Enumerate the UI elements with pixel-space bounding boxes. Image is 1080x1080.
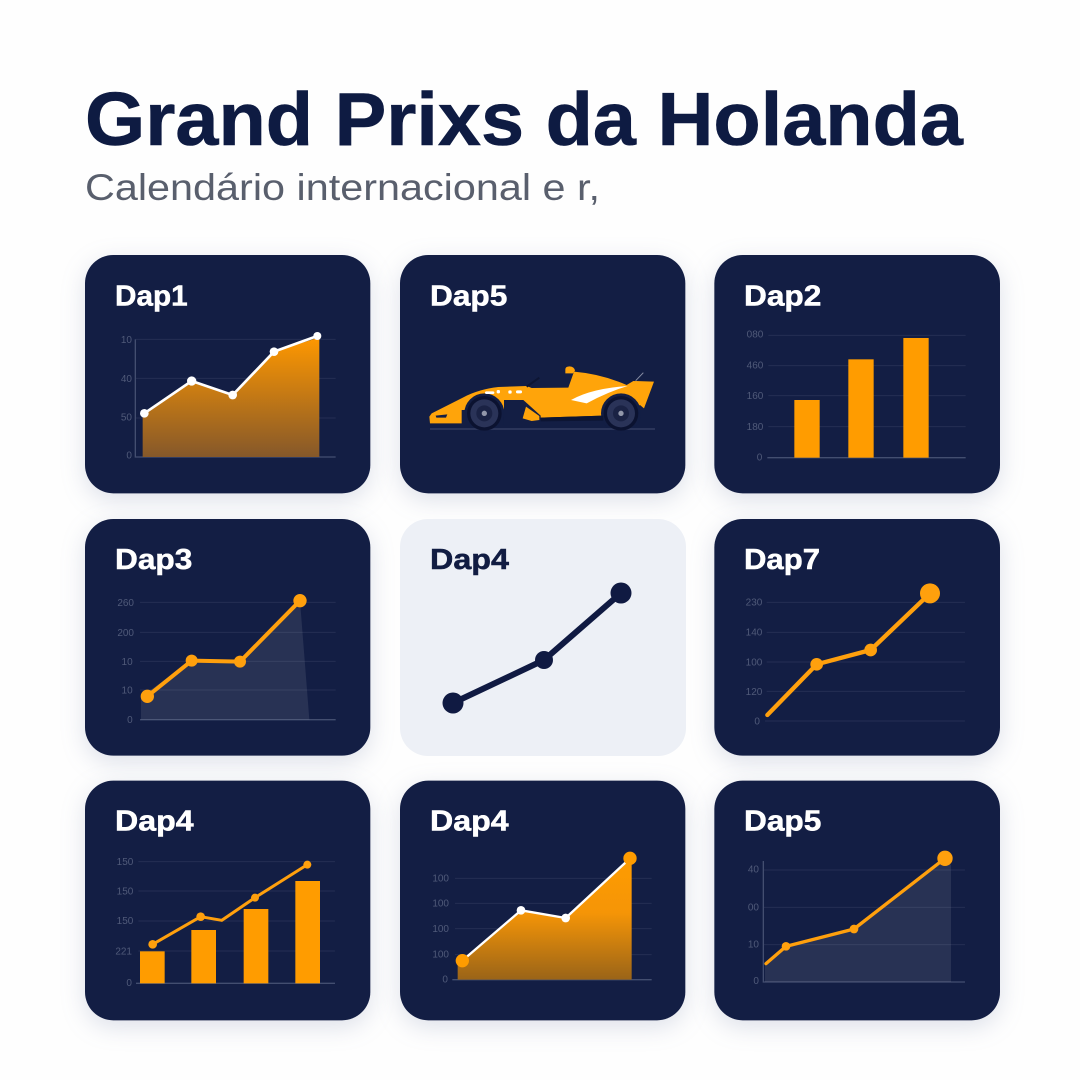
- area chart: Dap4: 100: [432, 924, 449, 935]
- panel: Dap5 race car: [400, 255, 685, 493]
- area chart: Dap1: 0: [126, 450, 132, 461]
- line chart: Dap5: [748, 851, 965, 987]
- bar chart: Dap2: 0: [757, 453, 763, 464]
- area chart: Dap1: 10: [121, 335, 132, 346]
- panel heading: Dap5: Dap5: [430, 281, 507, 313]
- line chart: Dap7: 140: [746, 628, 763, 639]
- bar chart: Dap2: 160: [747, 391, 764, 402]
- panel: Dap4 combo bar and line chart: [85, 781, 370, 1020]
- subtitle: Calendário internacional e r,: [85, 167, 600, 208]
- area chart: Dap4: 0: [442, 974, 448, 985]
- line chart: Dap3: 0: [127, 715, 133, 726]
- line chart: Dap3: [117, 594, 336, 726]
- panel: Dap4 area chart: [400, 781, 685, 1020]
- area chart: Dap4: [432, 852, 652, 985]
- area chart: Dap4: 100: [432, 949, 449, 960]
- panel: Dap3 line chart: [85, 519, 370, 756]
- line chart: Dap7: 120: [746, 687, 763, 698]
- line chart: Dap3: 10: [122, 657, 133, 668]
- combo chart: bars with trend line: 0: [126, 978, 132, 989]
- line chart: navy three points: [442, 582, 632, 714]
- panel: Dap1 area chart: [85, 255, 370, 493]
- bar chart: Dap2: 460: [747, 360, 764, 371]
- panel: Dap4 light line chart: [400, 519, 686, 756]
- panel heading: Dap4 light: Dap4: [430, 543, 509, 575]
- area chart: Dap1: [121, 332, 336, 461]
- line chart: Dap5: 10: [748, 940, 759, 951]
- line chart: Dap3: 260: [117, 598, 134, 609]
- panel heading: Dap5 line: Dap5: [744, 806, 821, 838]
- bar chart: Dap2: 180: [747, 422, 764, 433]
- line chart: Dap7: 230: [746, 598, 763, 609]
- line chart: Dap5: 40: [748, 864, 759, 875]
- panel heading: Dap3: Dap3: [115, 544, 192, 576]
- combo chart: bars with trend line: 150: [117, 916, 134, 927]
- combo chart: bars with trend line: 150: [117, 887, 134, 898]
- panel heading: Dap1: Dap1: [115, 281, 188, 313]
- title: Grand Prixs da Holanda: [85, 77, 964, 161]
- bar chart: Dap2: [747, 329, 966, 464]
- line chart: Dap5: 0: [753, 976, 759, 987]
- line chart: Dap7: 100: [746, 658, 763, 669]
- icon: orange race car: [429, 366, 655, 433]
- panel heading: Dap7: Dap7: [744, 544, 820, 576]
- line chart: Dap7: [746, 583, 965, 727]
- panel: Dap2 bar chart: [714, 255, 1000, 493]
- area chart: Dap4: 100: [432, 874, 449, 885]
- panel: Dap5 line chart: [714, 781, 1000, 1020]
- line chart: Dap3: 10: [122, 686, 133, 697]
- line chart: Dap3: 200: [117, 628, 134, 639]
- combo chart: bars with trend line: 150: [117, 857, 134, 868]
- bar chart: Dap2: 080: [747, 329, 764, 340]
- line chart: Dap7: 0: [754, 716, 760, 727]
- area chart: Dap1: 40: [121, 374, 132, 385]
- combo chart: bars with trend line: [115, 857, 335, 989]
- area chart: Dap4: 100: [432, 899, 449, 910]
- panel heading: Dap2: Dap2: [744, 281, 821, 313]
- area chart: Dap1: 50: [121, 413, 132, 424]
- combo chart: bars with trend line: 221: [115, 946, 132, 957]
- panel heading: Dap4 combo: Dap4: [115, 806, 194, 838]
- panel: Dap7 line chart: [714, 519, 1000, 756]
- line chart: Dap5: 00: [748, 903, 759, 914]
- panel heading: Dap4 area: Dap4: [430, 806, 509, 838]
